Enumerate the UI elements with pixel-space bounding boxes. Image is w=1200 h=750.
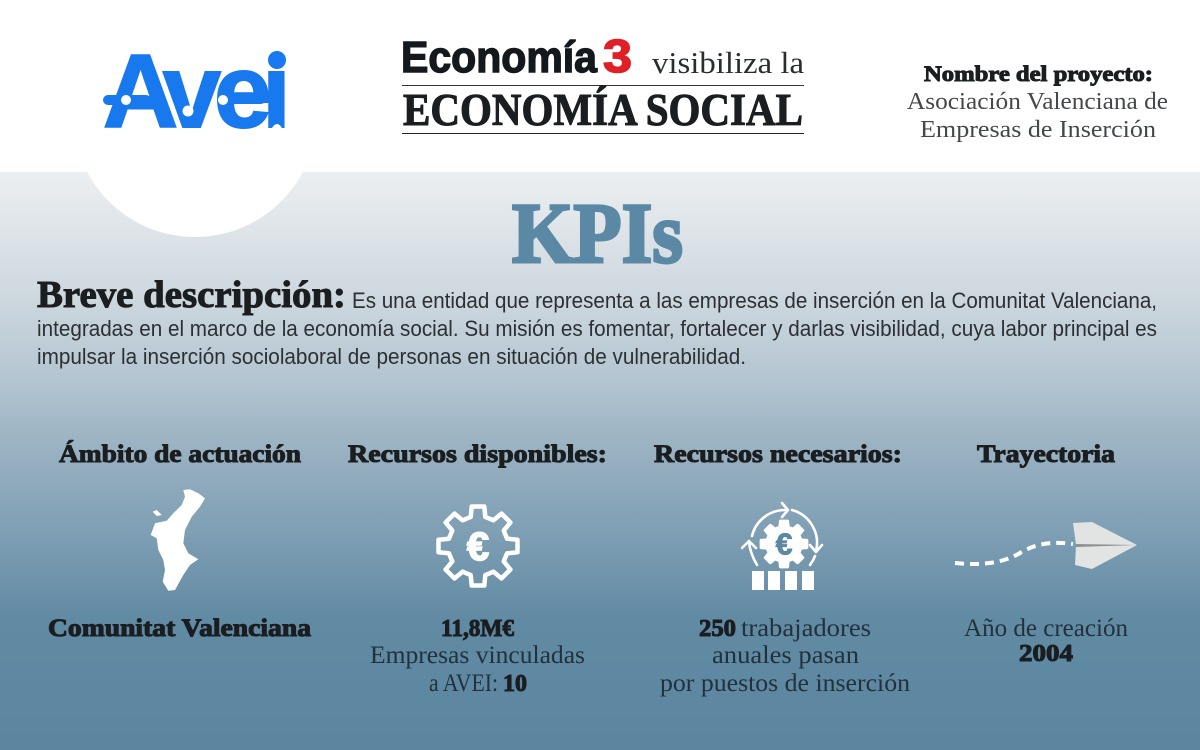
column: recursos disponibles: Empresas vinculadas: [370, 642, 585, 669]
masthead: Economía 3 visibiliza la ECONOMÍA SOCIAL: ECONOMÍA SOCIAL: [403, 85, 803, 135]
icon: paper plane with dashed trail: [955, 522, 1137, 569]
description: impulsar la inserción sociolaboral de personas en situación de vulnerabilidad.: [37, 344, 746, 369]
column: recursos disponibles: 11,8M€: [441, 616, 514, 642]
icon: Comunitat Valenciana map: [151, 489, 205, 591]
column: trayectoria: [955, 441, 1137, 667]
description: [37, 274, 1157, 369]
icon: gear, cycle arrows and blocks: [742, 503, 822, 590]
column: recursos necesarios: por puestos de inserción: [660, 670, 911, 697]
description: integradas en el marco de la economía social. Su misión es fomentar, fortalecer y darlas visibilidad, cuya labor principal es: [37, 316, 1157, 341]
masthead: Economía 3 visibiliza la ECONOMÍA SOCIAL: 3: [603, 30, 632, 82]
column: recursos necesarios: trabajadores: [741, 615, 871, 642]
column: recursos necesarios: anuales pasan: [712, 642, 860, 669]
project name: Nombre del proyecto:: [924, 61, 1153, 86]
column: recursos disponibles: 10: [503, 671, 527, 697]
icon: gear, cycle arrows and blocks: €: [776, 528, 793, 561]
description: Breve descripción:: [37, 274, 346, 316]
column: ámbito de actuación: [48, 440, 312, 642]
column: recursos disponibles: Recursos disponibles:: [348, 441, 607, 468]
column: recursos necesarios: [654, 441, 911, 697]
project name: [907, 61, 1168, 143]
masthead: Economía 3 visibiliza la ECONOMÍA SOCIAL: Economía: [401, 33, 597, 82]
column: recursos necesarios: 250: [699, 616, 736, 642]
column: ámbito de actuación: Comunitat Valenciana: [48, 615, 312, 642]
title: KPIs: KPIs: [512, 185, 683, 281]
column: trayectoria: 2004: [1019, 641, 1073, 667]
masthead: Economía 3 visibiliza la ECONOMÍA SOCIAL: visibiliza la: [652, 45, 804, 80]
icon: gear with euro: €: [467, 525, 489, 569]
description: Es una entidad que representa a las empresas de inserción en la Comunitat Valenciana,: [352, 288, 1157, 313]
column: recursos disponibles: a AVEI:: [429, 670, 498, 697]
logo: Avei: Avei: [103, 34, 291, 150]
column: recursos necesarios: Recursos necesarios:: [654, 441, 902, 468]
column: trayectoria: Año de creación: [964, 615, 1128, 642]
column: recursos disponibles: [348, 441, 607, 697]
column: ámbito de actuación: Ámbito de actuación: [59, 440, 301, 468]
masthead: Economía 3 visibiliza la ECONOMÍA SOCIAL: [401, 30, 804, 135]
column: trayectoria: Trayectoria: [977, 441, 1116, 468]
icon: gear with euro: [438, 506, 518, 586]
project name: Empresas de Inserción: [920, 117, 1156, 143]
project name: Asociación Valenciana de: [907, 89, 1168, 115]
